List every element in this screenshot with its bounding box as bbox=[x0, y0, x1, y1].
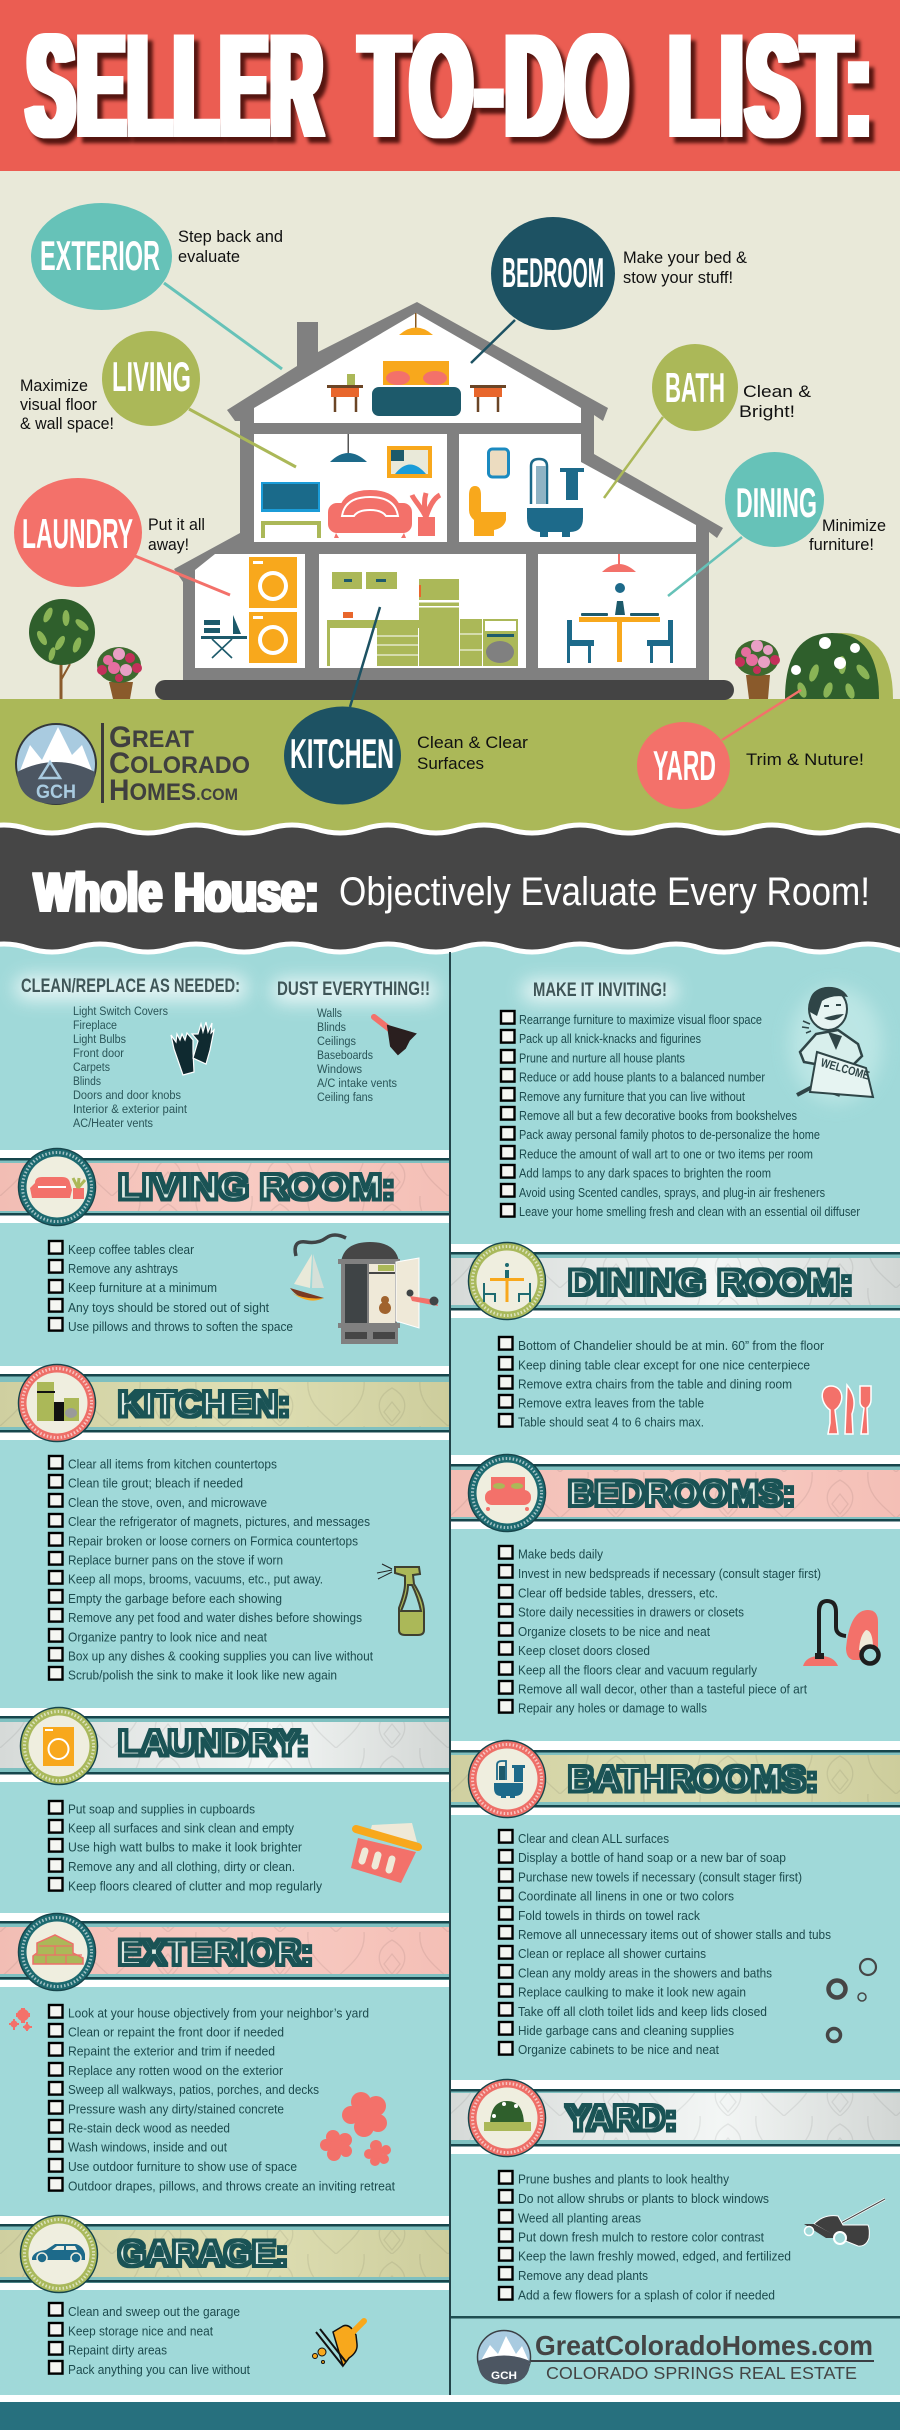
panel: clean/replace: CLEAN/REPLACE AS NEEDED: bbox=[21, 976, 240, 997]
icon: dining chairs bbox=[567, 620, 673, 663]
checklist: exterior: Outdoor drapes, pillows, and throws create an inviting retreat bbox=[68, 2180, 395, 2194]
bottom strip bbox=[0, 2395, 900, 2430]
banner: kitchen bbox=[0, 1364, 449, 1442]
icon: gloves bbox=[171, 1022, 214, 1075]
logo: Great Colorado Homes bbox=[16, 721, 250, 807]
checklist: bathrooms: Replace caulking to make it look new again bbox=[518, 1986, 746, 2000]
logo: Great Colorado Homes: COLORADO bbox=[109, 747, 250, 780]
panel: make it inviting: Reduce or add house plants to a balanced number bbox=[519, 1071, 765, 1085]
panel: make it inviting: Pack away personal family photos to de-personalize the home bbox=[519, 1128, 820, 1142]
checklist: kitchen: Keep all mops, brooms, vacuums, etc., put away. bbox=[68, 1573, 323, 1587]
badge: washer bbox=[20, 1708, 98, 1784]
icon: bathroom mirror bbox=[488, 449, 508, 477]
checklist: exterior: Re-stain deck wood as needed bbox=[68, 2122, 230, 2136]
callout: laundry: Put it all bbox=[148, 515, 205, 534]
banner: dining room bbox=[451, 1242, 900, 1320]
title band bbox=[0, 0, 900, 171]
callout: bedroom: Make your bed & bbox=[623, 248, 748, 267]
panel: make it inviting: Avoid using Scented candles, sprays, and plug-in air fresheners bbox=[519, 1186, 825, 1200]
panel: clean/replace: Blinds bbox=[73, 1074, 101, 1088]
callout: living: Maximize bbox=[20, 376, 88, 395]
badge: car bbox=[20, 2216, 98, 2292]
icon: bed bbox=[372, 361, 461, 416]
callout: yard: YARD bbox=[653, 742, 716, 789]
icon: dustpan bbox=[312, 2321, 364, 2366]
icon: small flowers bbox=[9, 2008, 32, 2031]
icon: television bbox=[261, 482, 320, 512]
checklist: dining room: Table should seat 4 to 6 chairs max. bbox=[518, 1416, 704, 1430]
icon: towel bbox=[560, 468, 584, 500]
icon: kitchen cabinets bbox=[332, 572, 397, 589]
checklist: garage: Clean and sweep out the garage bbox=[68, 2305, 240, 2319]
checklist: bathrooms: Display a bottle of hand soap or a new bar of soap bbox=[518, 1851, 786, 1865]
checklist: exterior: Sweep all walkways, patios, porches, and decks bbox=[68, 2083, 319, 2097]
banner: kitchen: KITCHEN: bbox=[118, 1385, 290, 1424]
icon: bubbles bbox=[828, 1959, 876, 2042]
teal checklist background wave bbox=[0, 944, 900, 1100]
icon: spray bottle bbox=[377, 1564, 424, 1635]
checklist: kitchen bbox=[49, 1456, 373, 1683]
banner: garage bbox=[0, 2216, 449, 2292]
callout: bedroom: stow your stuff! bbox=[623, 268, 733, 287]
logo: Great Colorado Homes: HOMES.COM bbox=[109, 774, 238, 807]
callout: bath: Clean & bbox=[743, 382, 812, 401]
checklist: bedrooms: Clear off bedside tables, dressers, etc. bbox=[518, 1586, 718, 1600]
checklist: bathrooms: Clear and clean ALL surfaces bbox=[518, 1832, 669, 1846]
panel: dust everything: Windows bbox=[317, 1062, 362, 1076]
checklist: kitchen: Scrub/polish the sink to make it look like new again bbox=[68, 1669, 337, 1683]
checklist: yard: Do not allow shrubs or plants to block windows bbox=[518, 2192, 769, 2206]
beige scene background bbox=[0, 171, 900, 699]
icon: framed picture bbox=[387, 446, 432, 478]
banner: bathrooms bbox=[451, 1740, 900, 1818]
callout: bedroom: BEDROOM bbox=[502, 249, 604, 296]
panel: clean/replace: Fireplace bbox=[73, 1018, 117, 1032]
title: SELLER bbox=[27, 4, 325, 167]
icon: tv table bbox=[263, 523, 319, 538]
icon: potted plant bbox=[412, 493, 440, 536]
banner: living room: LIVING ROOM: bbox=[118, 1168, 395, 1207]
house structure bbox=[174, 302, 723, 680]
dark whole-house band bbox=[0, 800, 900, 970]
callout: dining: Minimize bbox=[822, 516, 886, 535]
checklist: living room: Remove any ashtrays bbox=[68, 1262, 178, 1276]
checklist: exterior: Clean or repaint the front door if needed bbox=[68, 2026, 284, 2040]
checklist: exterior: Look at your house objectively from your neighbor’s yard bbox=[68, 2006, 369, 2020]
checklist: bathrooms: Remove all unnecessary items out of shower stalls and tubs bbox=[518, 1928, 831, 1942]
icon: refrigerator bbox=[419, 579, 459, 666]
footer logo: GreatColoradoHomes.com bbox=[535, 2330, 873, 2361]
callout: bath bbox=[604, 344, 812, 498]
checklist: bedrooms: Keep closet doors closed bbox=[518, 1644, 650, 1658]
badge: bed bbox=[468, 1454, 546, 1532]
callout: bath: Bright! bbox=[739, 402, 795, 421]
badge: bathtub bbox=[468, 1740, 546, 1818]
icon: dining lamp bbox=[602, 554, 636, 572]
callout: living: & wall space! bbox=[20, 414, 114, 433]
icon: laundry basket bbox=[351, 1823, 418, 1883]
icon: toilet bbox=[469, 486, 506, 536]
checklist: kitchen: Empty the garbage before each showing bbox=[68, 1592, 282, 1606]
callout: dining bbox=[668, 452, 886, 596]
badge: kitchen bbox=[18, 1364, 96, 1442]
badge: sofa bbox=[18, 1148, 96, 1226]
checklist: kitchen: Organize pantry to look nice and neat bbox=[68, 1630, 267, 1644]
checklist: bedrooms: Store daily necessities in drawers or closets bbox=[518, 1606, 744, 1620]
panel: make it inviting: MAKE IT INVITING! bbox=[533, 980, 667, 1001]
callout: laundry: LAUNDRY bbox=[22, 510, 133, 557]
callout: kitchen bbox=[284, 607, 528, 804]
checklist: dining room bbox=[499, 1337, 824, 1430]
icon: sailboat bbox=[290, 1254, 324, 1301]
logo: Great Colorado Homes: GREAT bbox=[109, 721, 194, 754]
checklist: kitchen: Box up any dishes & cooking supplies you can live without bbox=[68, 1650, 373, 1664]
icon: vacuum cleaner bbox=[803, 1601, 878, 1666]
panel: make it inviting: Prune and nurture all house plants bbox=[519, 1051, 685, 1065]
panel: make it inviting bbox=[501, 980, 860, 1219]
icon: attic lamp bbox=[399, 313, 433, 335]
banner: yard: YARD: bbox=[566, 2099, 677, 2138]
title: TO-DO bbox=[360, 4, 631, 167]
icon: right flowering bush bbox=[785, 633, 893, 700]
checklist: kitchen: Clear the refrigerator of magnets, pictures, and messages bbox=[68, 1515, 370, 1529]
icon: living room lamp bbox=[330, 434, 367, 462]
icon: kitchen counter and drawers bbox=[327, 612, 419, 666]
banner: exterior bbox=[0, 1913, 449, 1990]
panel: make it inviting: Remove any furniture that you can live without bbox=[519, 1090, 745, 1104]
checklist: exterior bbox=[49, 2005, 395, 2194]
icon: right flower pot bbox=[735, 640, 780, 699]
panel: clean/replace bbox=[15, 976, 247, 1130]
column divider bbox=[449, 952, 451, 2395]
checklist: exterior: Replace any rotten wood on the exterior bbox=[68, 2064, 283, 2078]
checklist: yard: Add a few flowers for a splash of color if needed bbox=[518, 2288, 775, 2302]
banner: dining room: DINING ROOM: bbox=[568, 1264, 853, 1302]
divider above footer logo bbox=[451, 2316, 900, 2318]
panel: make it inviting: Rearrange furniture to maximize visual floor space bbox=[519, 1013, 762, 1027]
checklist: kitchen: Replace burner pans on the stove if worn bbox=[68, 1554, 283, 1568]
badge: dining table bbox=[468, 1242, 546, 1320]
checklist: living room: Keep furniture at a minimum bbox=[68, 1281, 217, 1295]
checklist: yard: Remove any dead plants bbox=[518, 2269, 648, 2283]
checklist: exterior: Pressure wash any dirty/stained concrete bbox=[68, 2102, 284, 2116]
checklist: laundry bbox=[49, 1801, 323, 1893]
checklist: yard bbox=[499, 2171, 791, 2302]
callout: kitchen: Clean & Clear bbox=[417, 733, 528, 752]
checklist: living room: Use pillows and throws to soften the space bbox=[68, 1320, 293, 1334]
checklist: bathrooms: Clean or replace all shower curtains bbox=[518, 1947, 706, 1961]
checklist: dining room: Remove extra leaves from the table bbox=[518, 1397, 704, 1411]
banner: living room bbox=[0, 1148, 449, 1226]
banner: bedrooms: BEDROOMS: bbox=[568, 1474, 795, 1514]
checklist: bathrooms: Fold towels in thirds on towel rack bbox=[518, 1909, 701, 1923]
callout: living: LIVING bbox=[112, 353, 191, 400]
icon: lawn mower bbox=[804, 2199, 885, 2246]
callout: living: visual floor bbox=[20, 395, 97, 414]
checklist: bathrooms: Clean any moldy areas in the showers and baths bbox=[518, 1966, 772, 1980]
callout: laundry bbox=[14, 478, 230, 595]
callout: exterior: EXTERIOR bbox=[40, 232, 160, 279]
icon: duster bbox=[374, 1017, 415, 1054]
panel: clean/replace: Front door bbox=[73, 1046, 124, 1060]
checklist: laundry: Remove any and all clothing, dirty or clean. bbox=[68, 1860, 295, 1874]
panel: clean/replace: Doors and door knobs bbox=[73, 1088, 181, 1102]
checklist: garage: Repaint dirty areas bbox=[68, 2344, 167, 2358]
checklist: bedrooms: Remove all wall decor, other than a tasteful piece of art bbox=[518, 1682, 807, 1696]
checklist: exterior: Use outdoor furniture to show use of space bbox=[68, 2160, 297, 2174]
checklist: garage: Pack anything you can live without bbox=[68, 2363, 250, 2377]
callout: bedroom bbox=[471, 217, 748, 363]
checklist: exterior: Wash windows, inside and out bbox=[68, 2141, 227, 2155]
icon: sofa bbox=[328, 490, 412, 538]
checklist: kitchen: Clear all items from kitchen countertops bbox=[68, 1458, 277, 1472]
icon: swoosh arrow bbox=[295, 1235, 346, 1256]
callout: exterior bbox=[31, 203, 283, 369]
checklist: kitchen: Clean the stove, oven, and microwave bbox=[68, 1496, 267, 1510]
callout: yard: Trim & Nuture! bbox=[746, 750, 864, 769]
callout: kitchen: KITCHEN bbox=[290, 730, 394, 777]
icon: cutlery bbox=[822, 1385, 871, 1434]
icon: welcome man bbox=[790, 987, 882, 1103]
callout: kitchen: Surfaces bbox=[417, 754, 484, 773]
icon: left tree bbox=[29, 599, 95, 699]
checklist: bathrooms: Take off all cloth toilet lids and keep lids closed bbox=[518, 2005, 767, 2019]
checklist: kitchen: Clean tile grout; bleach if needed bbox=[68, 1477, 243, 1491]
footer logo: GCH bbox=[491, 2370, 517, 2382]
checklist: yard: Put down fresh mulch to restore color contrast bbox=[518, 2230, 764, 2244]
footer logo bbox=[478, 2330, 874, 2384]
icon: ironing board bbox=[201, 615, 247, 658]
green lawn band with wavy edge bbox=[0, 650, 900, 833]
checklist: bedrooms: Keep all the floors clear and vacuum regularly bbox=[518, 1663, 758, 1677]
panel: clean/replace: Light Bulbs bbox=[73, 1032, 126, 1046]
panel: dust everything bbox=[272, 979, 437, 1104]
callout: exterior: Step back and bbox=[178, 227, 283, 246]
foundation bbox=[155, 680, 734, 700]
checklist: living room: Any toys should be stored out of sight bbox=[68, 1301, 269, 1315]
banner: yard bbox=[451, 2080, 900, 2156]
icon: left flower pot bbox=[97, 647, 142, 699]
icon: bathtub bbox=[527, 508, 583, 537]
checklist: exterior: Repaint the exterior and trim if needed bbox=[68, 2045, 275, 2059]
callout: living bbox=[20, 331, 296, 467]
callout: bath: BATH bbox=[665, 364, 725, 411]
checklist: bathrooms: Coordinate all linens in one or two colors bbox=[518, 1890, 734, 1904]
checklist: bedrooms bbox=[499, 1546, 821, 1716]
panel: dust everything: DUST EVERYTHING!! bbox=[277, 979, 430, 1000]
checklist: dining room: Bottom of Chandelier should be at min. 60” from the floor bbox=[518, 1339, 824, 1353]
panel: dust everything: Blinds bbox=[317, 1020, 346, 1034]
icon: welcome man: WELCOME bbox=[819, 1055, 871, 1083]
panel: dust everything: Walls bbox=[317, 1006, 342, 1020]
panel: dust everything: A/C intake vents bbox=[317, 1076, 397, 1090]
panel: make it inviting: Add lamps to any dark spaces to brighten the room bbox=[519, 1167, 771, 1181]
checklist: laundry: Keep all surfaces and sink clean and empty bbox=[68, 1822, 295, 1836]
panel: clean/replace: Light Switch Covers bbox=[73, 1004, 168, 1018]
badge: bush bbox=[468, 2080, 546, 2156]
icon: wardrobe with toys bbox=[338, 1242, 438, 1344]
checklist: living room: Keep coffee tables clear bbox=[68, 1243, 194, 1257]
footer logo: COLORADO SPRINGS REAL ESTATE bbox=[546, 2363, 857, 2383]
callout: dining: DINING bbox=[736, 479, 817, 526]
checklist: dining room: Remove extra chairs from the table and dining room bbox=[518, 1377, 792, 1391]
callout: yard bbox=[637, 690, 864, 809]
panel: dust everything: Baseboards bbox=[317, 1048, 373, 1062]
panel: clean/replace: Carpets bbox=[73, 1060, 110, 1074]
banner: exterior: EXTERIOR: bbox=[118, 1934, 313, 1972]
checklist: laundry: Use high watt bulbs to make it look brighter bbox=[68, 1841, 302, 1855]
icon: shower bbox=[531, 459, 547, 504]
checklist: yard: Keep the lawn freshly mowed, edged, and fertilized bbox=[518, 2250, 791, 2264]
checklist: bedrooms: Repair any holes or damage to walls bbox=[518, 1702, 707, 1716]
panel: dust everything: Ceiling fans bbox=[317, 1090, 373, 1104]
checklist: yard: Weed all planting areas bbox=[518, 2211, 641, 2225]
checklist: yard: Prune bushes and plants to look healthy bbox=[518, 2173, 730, 2187]
heading: whole house bbox=[34, 861, 870, 923]
checklist: dining room: Keep dining table clear except for one nice centerpiece bbox=[518, 1358, 810, 1372]
panel: make it inviting: Pack up all knick-knacks and figurines bbox=[519, 1032, 701, 1046]
icon: dining table and vase bbox=[579, 583, 660, 662]
checklist: laundry: Put soap and supplies in cupboards bbox=[68, 1802, 255, 1816]
checklist: bedrooms: Organize closets to be nice and neat bbox=[518, 1625, 710, 1639]
checklist: bathrooms: Hide garbage cans and cleaning supplies bbox=[518, 2024, 734, 2038]
checklist: kitchen: Remove any pet food and water dishes before showings bbox=[68, 1611, 362, 1625]
panel: clean/replace: AC/Heater vents bbox=[73, 1116, 153, 1130]
checklist: bathrooms: Purchase new towels if necessary (consult stager first) bbox=[518, 1870, 802, 1884]
icon: large flowers bbox=[320, 2092, 391, 2166]
banner: bathrooms: BATHROOMS: bbox=[568, 1760, 818, 1799]
icon: stove bbox=[460, 619, 518, 666]
checklist: bedrooms: Invest in new bedspreads if necessary (consult stager first) bbox=[518, 1567, 821, 1581]
panel: dust everything: Ceilings bbox=[317, 1034, 356, 1048]
checklist: living room bbox=[49, 1241, 293, 1334]
checklist: garage: Keep storage nice and neat bbox=[68, 2324, 213, 2338]
banner: laundry bbox=[0, 1708, 449, 1784]
panel: make it inviting: Remove all but a few decorative books from bookshelves bbox=[519, 1109, 797, 1123]
icon: bedside tables bbox=[327, 374, 506, 412]
callout: exterior: evaluate bbox=[178, 247, 240, 266]
callout: laundry: away! bbox=[148, 535, 189, 554]
checklist: garage bbox=[49, 2303, 250, 2377]
heading: whole house: Whole House: bbox=[34, 861, 319, 923]
checklist: bedrooms: Make beds daily bbox=[518, 1548, 604, 1562]
teal checklist background bbox=[0, 965, 900, 2395]
panel: clean/replace: Interior & exterior paint bbox=[73, 1102, 188, 1116]
badge: house bbox=[18, 1914, 96, 1990]
checklist: bathrooms bbox=[499, 1830, 831, 2057]
house bbox=[155, 302, 734, 700]
banner: laundry: LAUNDRY: bbox=[118, 1724, 309, 1763]
checklist: kitchen: Repair broken or loose corners on Formica countertops bbox=[68, 1534, 358, 1548]
icon: washer and dryer bbox=[249, 557, 297, 663]
logo: Great Colorado Homes: GCH bbox=[36, 782, 76, 803]
checklist: laundry: Keep floors cleared of clutter and mop regularly bbox=[68, 1879, 323, 1893]
checklist: bathrooms: Organize cabinets to be nice and neat bbox=[518, 2043, 719, 2057]
banner: bedrooms bbox=[451, 1454, 900, 1532]
callout: dining: furniture! bbox=[809, 535, 874, 554]
banner: garage: GARAGE: bbox=[118, 2234, 288, 2274]
panel: make it inviting: Reduce the amount of wall art to one or two items per room bbox=[519, 1147, 813, 1161]
